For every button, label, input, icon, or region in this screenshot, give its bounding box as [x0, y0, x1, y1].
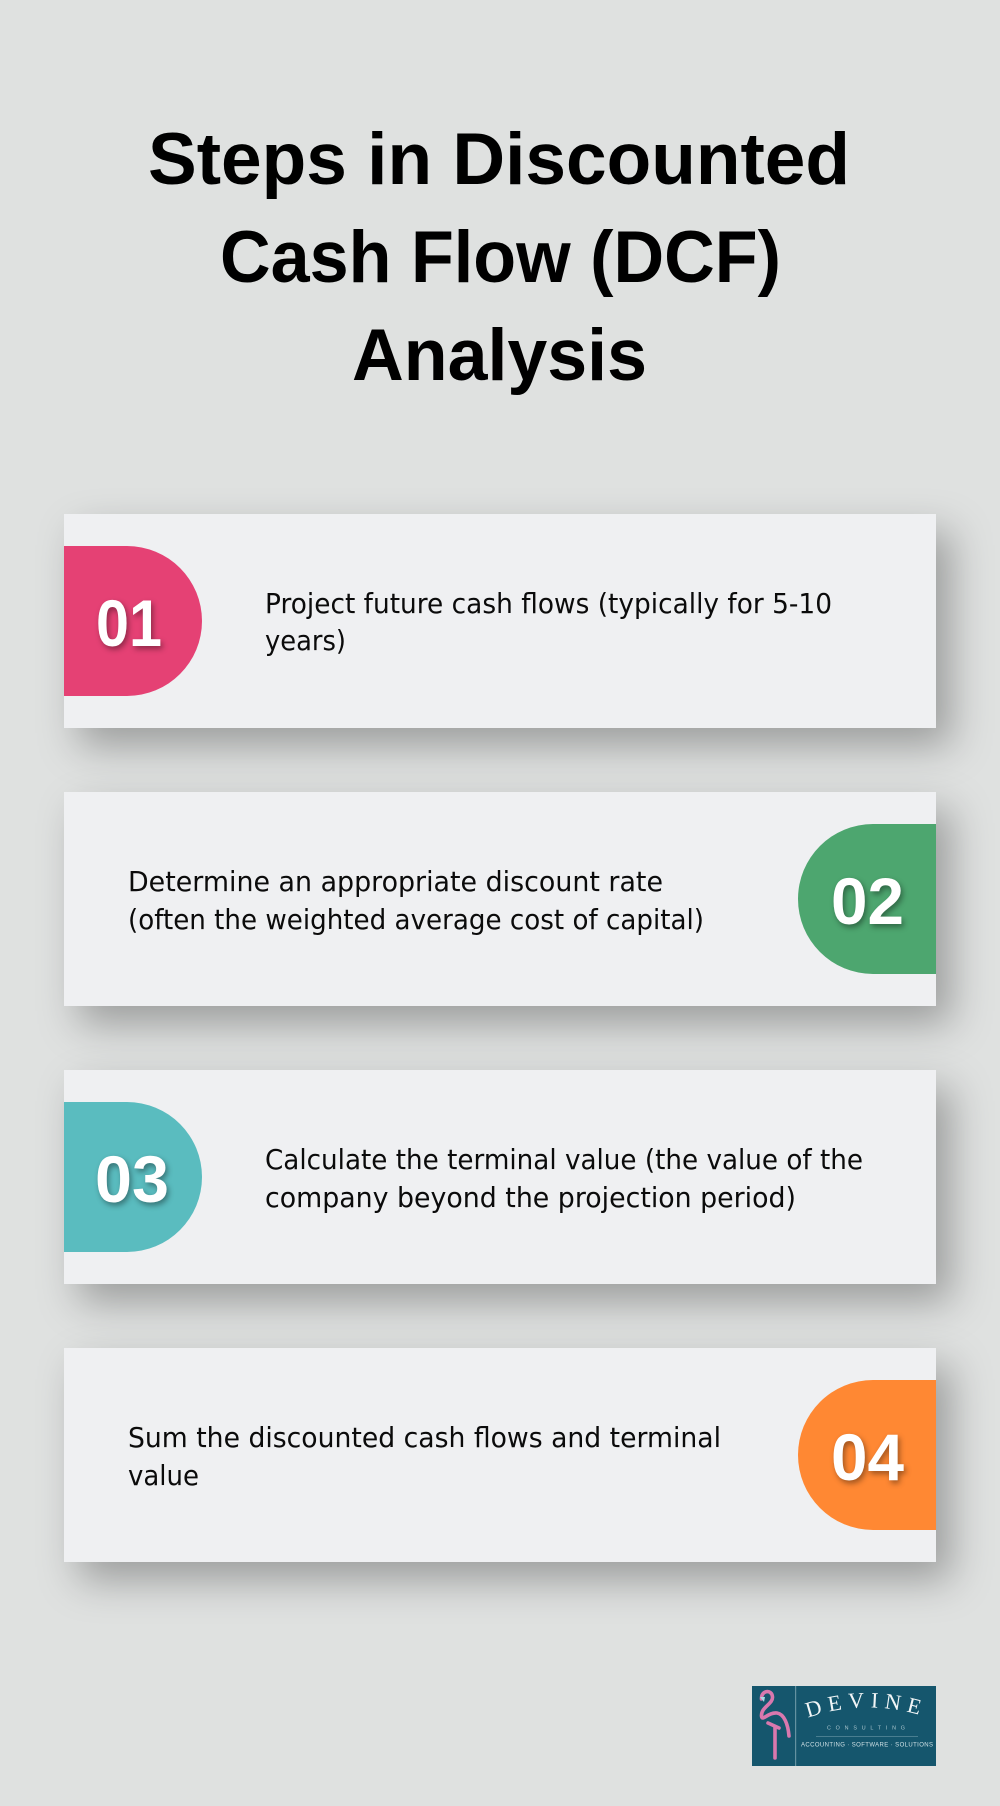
- number: 02: 02: [831, 864, 904, 938]
- panel: step 02: [64, 792, 936, 1006]
- title: Steps in Discounted: [148, 119, 850, 200]
- text: step 04: [128, 1422, 721, 1492]
- number: 03: 03: [95, 1142, 169, 1216]
- badge: 03: [64, 1102, 202, 1252]
- logo wordmark: DEVINE: [804, 1693, 921, 1718]
- logo text: tagline: ACCOUNTING · SOFTWARE · SOLUTIONS: [801, 1742, 933, 1748]
- logo text: consulting: CONSULTING: [827, 1726, 905, 1732]
- text: step 01: years): [265, 625, 346, 657]
- text: step 01: [265, 588, 832, 657]
- badge: 02: [798, 824, 936, 974]
- panel: step 04: [64, 1348, 936, 1562]
- number: 04: 04: [831, 1420, 904, 1494]
- logo: Devine Consulting: [752, 1686, 936, 1766]
- badge: 01: [64, 546, 202, 696]
- text: step 03: company beyond the projection period): [265, 1182, 796, 1214]
- panel: step 01: [64, 514, 936, 728]
- icon: flamingo: [761, 1692, 789, 1758]
- panel: step 03: [64, 1070, 936, 1284]
- text: step 03: Calculate the terminal value (the value of the: [265, 1144, 863, 1176]
- text: step 03: [265, 1144, 863, 1214]
- text: step 02: [128, 866, 704, 936]
- logo wordmark: DEVINE: DEVINE: [804, 1693, 921, 1718]
- title: [148, 119, 850, 396]
- text: step 02: (often the weighted average cost of capital): [128, 904, 704, 936]
- badge: 04: [798, 1380, 936, 1530]
- text: step 02: Determine an appropriate discount rate: [128, 866, 663, 898]
- title: Cash Flow (DCF): [220, 217, 781, 298]
- number: 01: 01: [96, 586, 162, 660]
- text: step 04: value: [128, 1460, 199, 1492]
- title: Analysis: [352, 315, 647, 396]
- text: step 01: Project future cash flows (typically for 5-10: [265, 588, 832, 620]
- text: step 04: Sum the discounted cash flows and terminal: [128, 1422, 721, 1454]
